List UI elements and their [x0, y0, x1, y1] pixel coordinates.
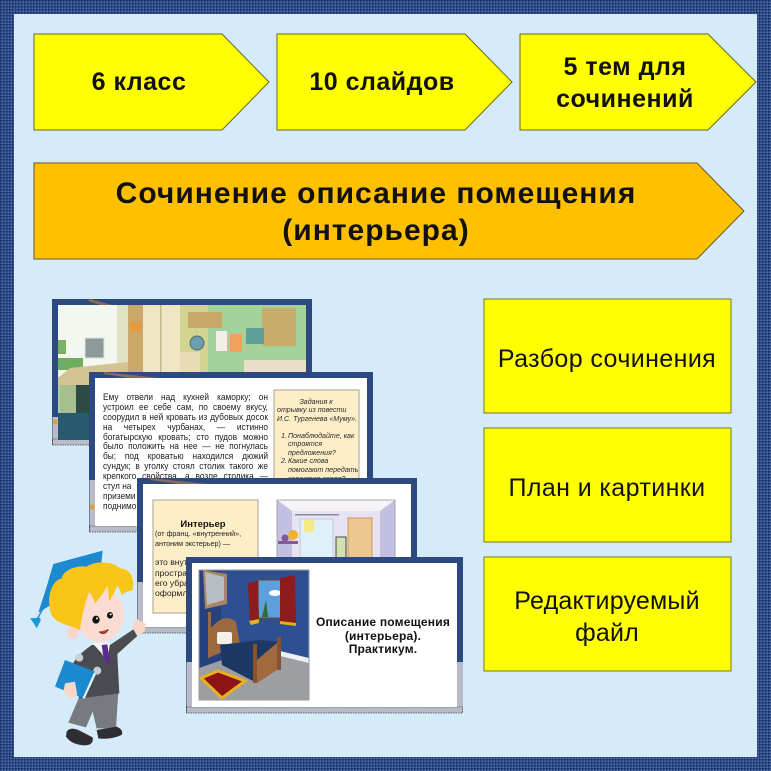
slide 2 task box: помогают передать: [288, 466, 359, 474]
slide 2 body text: стул на: [103, 480, 131, 491]
slide 2 task box: отрывку из повести: [277, 406, 346, 414]
room illustration: [277, 500, 395, 560]
arrow: 6 класс: 6 класс: [92, 68, 186, 96]
slide 2 task box: характер героя?: [287, 475, 345, 483]
book: [55, 660, 96, 699]
slide 2 body text: богатырскую кровать; сто пудов можно: [103, 431, 268, 442]
slide 2: text extract and tasks: [89, 372, 374, 532]
slide 3: definition of interior: [137, 478, 418, 633]
slide 2 task box: Понаблюдайте, как: [288, 432, 355, 440]
legs and shoes: [66, 692, 122, 745]
slide 2 body text: приземи: [103, 490, 135, 501]
slide 2 task box: Какие слова: [288, 457, 328, 465]
feature box: Разбор сочинения: Разбор сочинения: [498, 345, 716, 373]
slide 3 lower decoration: [228, 708, 266, 713]
slide 1: room photo: [52, 299, 312, 445]
slide 2 body text: [103, 392, 289, 522]
slide 2 body text: бы; под кроватью находился дюжий: [103, 450, 268, 461]
definition box: Интерьер: [180, 519, 226, 530]
definition box: (от франц. «внутренний»,: [155, 529, 241, 538]
slide 2 body text: на четырех чурбанах, — истинно: [103, 421, 268, 432]
definition box: оформл: [155, 588, 187, 598]
slide 2 task box: 2.: [280, 457, 287, 465]
title arrow: (интерьера): [282, 214, 470, 247]
arrow: 10 слайдов: 10 слайдов: [309, 68, 455, 96]
graduation cap: [30, 551, 103, 628]
arrow: 5 тем для сочинений: 5 тем для: [564, 53, 686, 81]
feature box: План и картинки: План и картинки: [508, 474, 706, 502]
slide 2 task box: [274, 390, 359, 490]
slide 2 task box: предложения?: [288, 449, 336, 457]
slide 2 body text: поднимо: [103, 500, 136, 511]
slide 4 heading: [316, 615, 450, 656]
feature box: Разбор сочинения: [484, 299, 731, 413]
slide 2 task box: Задания к: [299, 398, 333, 406]
arrow: 10 слайдов: [277, 34, 512, 130]
feature box: Редактируемый файл: Редактируемый: [514, 587, 700, 615]
slide 2 body text: крепкого свойства, а возле столика —: [103, 470, 268, 481]
definition box: [153, 500, 258, 613]
arrow: 6 класс: [34, 34, 269, 130]
arrow: 5 тем для сочинений: сочинений: [556, 85, 694, 113]
definition box: простра: [155, 568, 187, 578]
feature box: Редактируемый файл: [484, 557, 731, 671]
slide 4 heading: (интерьера).: [345, 629, 421, 643]
slide 4 heading: Описание помещения: [316, 615, 450, 629]
arrow: 5 тем для сочинений: [520, 34, 756, 130]
definition box: антоним экстерьер) —: [155, 539, 231, 548]
slide 4: practice title slide: [186, 557, 463, 713]
bedroom illustration: [199, 570, 309, 700]
feature box: Редактируемый файл: файл: [575, 619, 639, 647]
definition box: его убра: [155, 578, 189, 588]
slide 4 heading: Практикум.: [349, 642, 417, 656]
slide 2 body text: соорудил в ней кровать из дубовых досок: [103, 411, 268, 422]
definition box: это внут: [155, 557, 188, 567]
jacket and raised arm: [70, 618, 146, 698]
slide 2 body text: устроил ее себе сам, по своему вкусу,: [103, 401, 268, 412]
feature box: План и картинки: [484, 428, 731, 542]
slide 2 task box: И.С. Тургенева «Муму».: [277, 415, 357, 423]
title arrow: [34, 163, 744, 259]
head and hair: [49, 562, 133, 642]
title arrow: Сочинение описание помещения: [116, 177, 636, 210]
illustration: schoolboy with graduation cap and book: [30, 551, 146, 745]
slide 2 task box: 1.: [281, 432, 287, 440]
slide 2 body text: сундук; в уголку стоял столик такого же: [103, 460, 268, 471]
slide 2 body text: было положить на нее — не погнулась: [103, 440, 268, 451]
slide 2 task box: строятся: [288, 440, 322, 448]
